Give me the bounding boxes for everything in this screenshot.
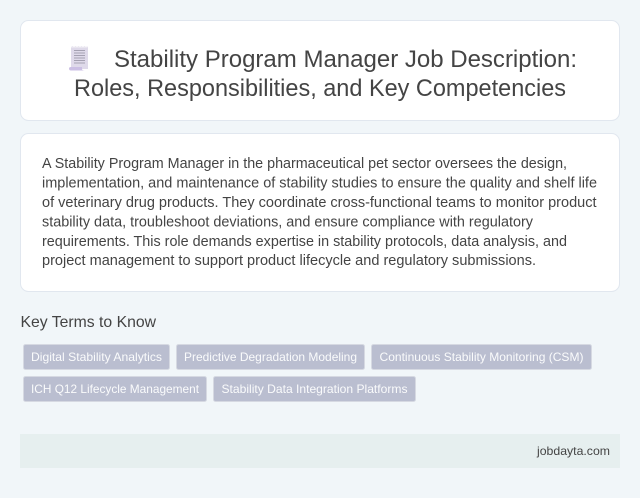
tag: ich q12 lifecycle management — [24, 376, 206, 402]
title line 1: Stability Program Manager Job Description: — [114, 46, 577, 73]
description text block: requirements. This role demands expertise in stability protocols, data analysis, and — [42, 234, 567, 250]
tag: predictive degradation modeling: Predictive Degradation Modeling — [184, 350, 357, 364]
footer site name: jobdayta.com — [536, 444, 610, 458]
tag: stability data integration platforms — [214, 376, 416, 402]
description text block: of veterinary drug products. They coordinate cross-functional teams to monitor product — [42, 195, 596, 211]
title line 2: Roles, Responsibilities, and Key Competencies — [74, 75, 566, 102]
tag: stability data integration platforms: Stability Data Integration Platforms — [222, 382, 408, 396]
description text block — [42, 156, 597, 269]
description text block: A Stability Program Manager in the pharmaceutical pet sector oversees the design, — [42, 156, 567, 172]
heading: key terms: Key Terms to Know — [20, 314, 156, 331]
footer bar — [20, 434, 620, 468]
tag: predictive degradation modeling — [176, 344, 364, 370]
description text block: project management to support product lifecycle and regulatory submissions. — [42, 253, 536, 269]
tag: digital stability analytics: Digital Stability Analytics — [31, 350, 162, 364]
panel: title card — [20, 20, 620, 120]
icon: document scroll — [69, 46, 88, 70]
description text block: implementation, and maintenance of stability studies to ensure the quality and shelf life — [42, 176, 597, 192]
tag: continuous stability monitoring: Continuous Stability Monitoring (CSM) — [380, 350, 584, 364]
tag: digital stability analytics — [24, 344, 170, 370]
description text block: stability data, troubleshoot deviations, and ensure compliance with regulatory — [42, 214, 534, 230]
tag: continuous stability monitoring — [372, 344, 592, 370]
tag: ich q12 lifecycle management: ICH Q12 Lifecycle Management — [31, 382, 200, 396]
panel: description card — [20, 134, 620, 292]
